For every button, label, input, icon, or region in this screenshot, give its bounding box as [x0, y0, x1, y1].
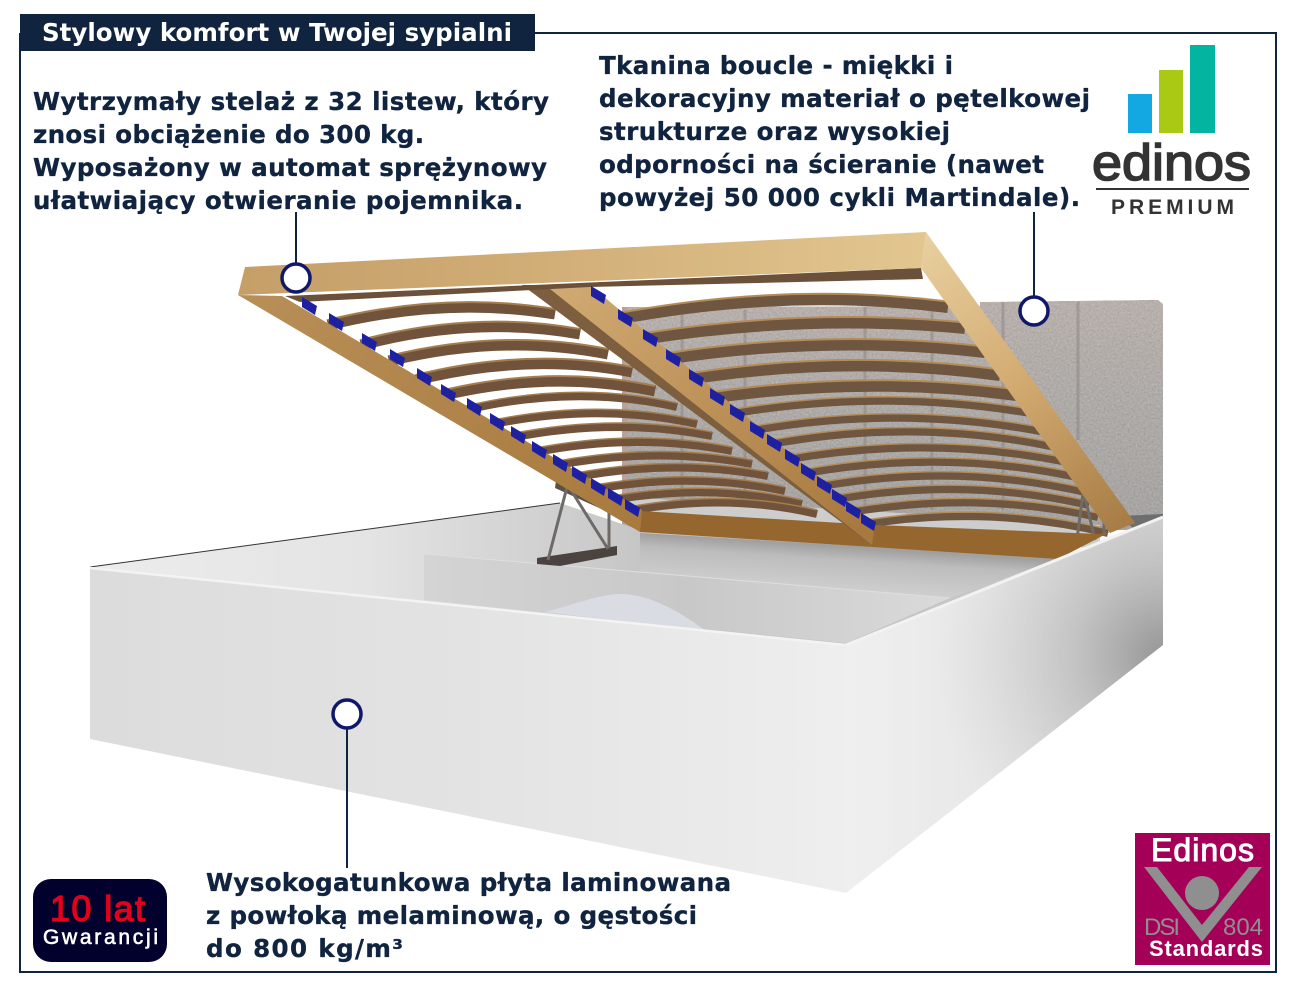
left lift mechanism	[537, 473, 617, 566]
title bar: Stylowy komfort w Twojej sypialni	[42, 18, 512, 47]
frame top bar	[238, 232, 926, 302]
callout marker: board	[333, 700, 361, 868]
text: laminated board description	[206, 868, 731, 963]
badge: 10 years warranty: Gwarancji	[43, 926, 158, 949]
text: slat frame description: Wyposażony w automat sprężynowy	[33, 153, 547, 182]
text: boucle fabric description: strukturze oraz wysokiej	[599, 117, 950, 146]
logo: edinos premium: edinos	[1092, 134, 1251, 191]
text: laminated board description: do 800 kg/m³	[206, 934, 403, 963]
bed slats: left section	[328, 302, 817, 514]
text: boucle fabric description	[599, 51, 1090, 212]
headboard: boucle fabric	[622, 300, 1163, 530]
base: front panel	[90, 567, 846, 893]
text: slat frame description: Wytrzymały stelaż z 32 listew, który	[33, 87, 549, 116]
text: boucle fabric description: dekoracyjny materiał o pętelkowej	[599, 84, 1090, 113]
badge: 10 years warranty	[33, 879, 167, 962]
text: boucle fabric description: powyżej 50 000 cykli Martindale).	[599, 183, 1080, 212]
frame left beam	[238, 295, 642, 532]
slat clips: left beam	[302, 297, 640, 517]
frame bottom rail	[640, 511, 1110, 559]
text: laminated board description: z powłoką melaminową, o gęstości	[206, 901, 697, 930]
logo: edinos premium: PREMIUM	[1111, 196, 1234, 219]
frame right beam	[921, 232, 1135, 533]
badge: Edinos standards: 804	[1223, 914, 1263, 941]
text: boucle fabric description: Tkanina boucle - miękki i	[599, 51, 953, 80]
badge: Edinos standards: Edinos	[1151, 832, 1254, 868]
text: slat frame description: znosi obciążenie do 300 kg.	[33, 120, 424, 149]
callout marker: slats	[282, 212, 310, 292]
text: slat frame description	[33, 87, 549, 215]
callout marker: fabric	[1020, 212, 1048, 325]
right lift mechanism	[1076, 493, 1104, 547]
logo: edinos premium	[1092, 45, 1251, 219]
bed slats: right section	[617, 294, 1108, 533]
badge: Edinos standards: Standards	[1149, 936, 1263, 961]
badge: Edinos standards	[1135, 832, 1270, 965]
floor visible behind slats	[622, 497, 1100, 548]
bed illustration	[90, 232, 1163, 893]
badge: 10 years warranty: 10 lat	[50, 888, 145, 929]
storage box interior	[90, 503, 1163, 645]
text: boucle fabric description: odporności na ścieranie (nawet	[599, 150, 1044, 179]
badge: Edinos standards: DSI	[1144, 914, 1180, 941]
base: right panel	[846, 517, 1163, 893]
pillow inside box	[545, 594, 706, 631]
frame middle beam	[522, 285, 875, 545]
text: laminated board description: Wysokogatunkowa płyta laminowana	[206, 868, 731, 897]
slat clips: middle beam	[591, 286, 876, 531]
text: slat frame description: ułatwiający otwieranie pojemnika.	[33, 186, 523, 215]
